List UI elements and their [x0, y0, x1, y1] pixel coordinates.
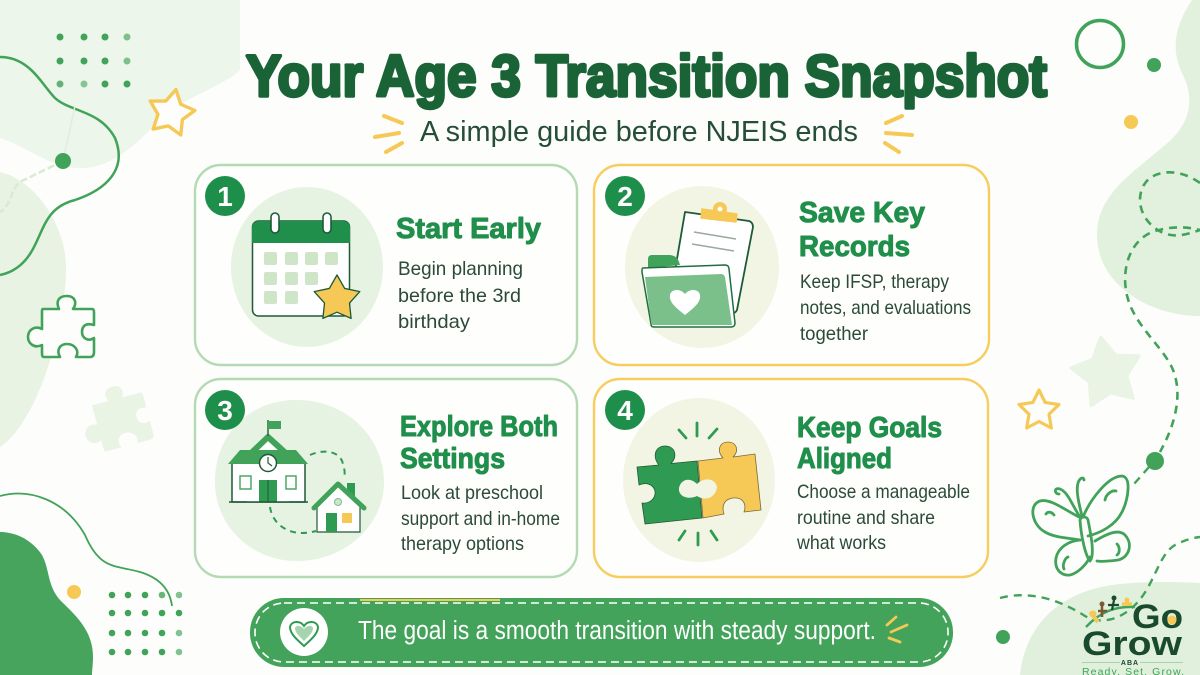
- logo rules: [1082, 662, 1183, 664]
- background blob: top left: [0, 0, 240, 168]
- icon: heart badge: [280, 608, 328, 656]
- card 1 frame: [195, 165, 577, 365]
- card 3 number badge: 3: [217, 395, 233, 426]
- card 4 number badge: 4: [617, 395, 633, 426]
- icon: butterfly: [1033, 476, 1129, 575]
- card 4 body: routine and share: [797, 507, 935, 529]
- card 2 icon backdrop: [625, 186, 779, 348]
- panel: card 2 Save Key Records: [594, 165, 989, 365]
- card 1 body: birthday: [398, 311, 470, 333]
- yellow dot: bottom left: [67, 585, 81, 599]
- card 4 body: [796, 481, 970, 554]
- banner: key takeaway: [250, 598, 953, 667]
- banner yellow accent: [360, 599, 500, 601]
- card 3 icon backdrop: [215, 400, 384, 561]
- card 1 number badge: [205, 176, 245, 216]
- icon: calendar with star: [252, 213, 360, 318]
- decorative dot: right: [1146, 452, 1164, 470]
- icon: pale star right: [1067, 332, 1146, 408]
- icon: pale puzzle left: [75, 380, 155, 456]
- card 4 body: Choose a manageable: [797, 481, 970, 503]
- logo word ABA: ABA: [1121, 660, 1139, 667]
- card 3 heading: Settings: [400, 443, 505, 475]
- card 4 icon backdrop: [623, 398, 775, 562]
- background blob: bottom left green: [0, 532, 93, 675]
- card 2 body: notes, and evaluations: [800, 297, 971, 319]
- background blob: top right: [1097, 0, 1200, 316]
- card 3 body: [401, 482, 560, 555]
- banner stitched border: [255, 603, 948, 662]
- decorative dot: top right yellow: [1124, 115, 1138, 129]
- decorative curve: bottom left: [0, 494, 172, 606]
- logo: Go Grow ABA: [1082, 596, 1184, 675]
- panel: card 3 Explore Both Settings: [195, 379, 577, 577]
- icon: interlocking puzzle pieces: [637, 423, 761, 545]
- card 3 body: therapy options: [401, 533, 524, 555]
- logo arc: [1086, 607, 1135, 627]
- card 3 frame: [195, 379, 577, 577]
- card 2 body: [800, 271, 971, 345]
- logo word Grow: Grow: [1082, 625, 1183, 663]
- card 3 body: support and in-home: [401, 508, 560, 530]
- dashed trail: right: [1125, 172, 1200, 452]
- banner text: The goal is a smooth transition with steady support.: [358, 617, 876, 645]
- card 1 heading: Start Early: [396, 213, 541, 245]
- card 2 number badge: [605, 176, 645, 216]
- card 4 frame: [594, 379, 988, 577]
- decorative ring: top right: [1076, 20, 1124, 68]
- card 2 heading: Records: [799, 231, 910, 263]
- card 3 number badge: [205, 390, 245, 430]
- icon: clipboard and folder: [642, 202, 753, 327]
- card 4 heading: Aligned: [797, 443, 892, 475]
- card 2 frame: [594, 165, 989, 365]
- card 2 number badge: 2: [617, 181, 633, 212]
- subtitle sparks: left marks: [375, 116, 402, 152]
- logo figures: [1090, 596, 1132, 622]
- icon: yellow star outline left: [145, 85, 198, 137]
- card 1 body: [398, 258, 523, 333]
- card 1 body: before the 3rd: [398, 285, 521, 307]
- background blob: left circle: [0, 172, 66, 447]
- card 1 icon backdrop: [231, 187, 383, 347]
- decorative dot: left: [55, 153, 71, 169]
- card 4 body: what works: [796, 532, 886, 554]
- subtitle sparks: right marks: [885, 116, 912, 152]
- card 2 heading: Save Key: [799, 197, 925, 229]
- card 1 body: Begin planning: [398, 258, 523, 280]
- decorative curve: top left: [0, 57, 119, 275]
- title: Your Age 3 Transition Snapshot: [246, 44, 1047, 109]
- card 2 body: together: [800, 323, 868, 345]
- panel: card 1 Start Early: [195, 165, 577, 365]
- logo yellow accent: [1168, 616, 1176, 624]
- dot grid: bottom left: [109, 592, 182, 655]
- card 2 heading: [799, 197, 925, 263]
- icon: school and house with dashed link: [228, 420, 364, 533]
- decorative dot: lower right: [996, 630, 1010, 644]
- logo word Go: Go: [1132, 598, 1183, 636]
- card 4 heading: Keep Goals: [797, 412, 942, 444]
- dot grid: top left: [56, 34, 130, 88]
- icon: puzzle outline left: [28, 296, 94, 357]
- banner sparks: [887, 617, 907, 642]
- card 3 heading: Explore Both: [400, 411, 558, 443]
- subtitle: A simple guide before NJEIS ends: [420, 116, 858, 148]
- card 4 heading: [797, 412, 942, 475]
- icon: yellow star outline right: [1019, 390, 1059, 428]
- banner pill: [250, 598, 953, 667]
- card 3 body: Look at preschool: [401, 482, 543, 504]
- dashed trail: lower right: [1000, 467, 1200, 620]
- card 3 heading: [400, 411, 558, 475]
- decorative pale line: left: [63, 106, 75, 161]
- decorative dashed trail: left: [0, 161, 63, 212]
- panel: card 4 Keep Goals Aligned: [594, 379, 988, 577]
- decorative dot: top right green: [1147, 58, 1161, 72]
- background blob: bottom right: [1020, 582, 1200, 675]
- card 2 body: Keep IFSP, therapy: [800, 271, 949, 293]
- card 1 number badge: 1: [217, 181, 233, 212]
- card 4 number badge: [605, 390, 645, 430]
